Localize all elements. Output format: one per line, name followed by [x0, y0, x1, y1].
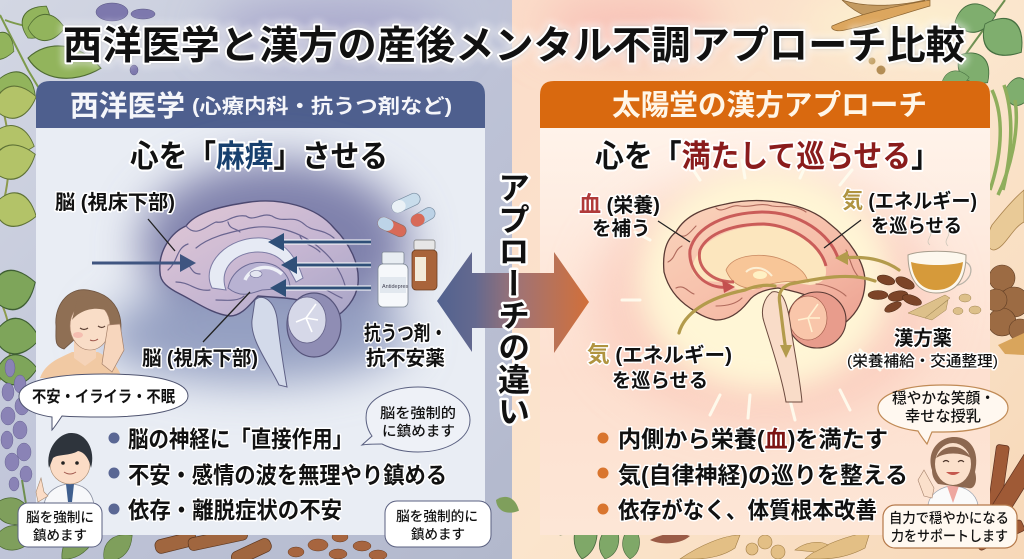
label: blood: 血 (栄養)	[579, 192, 660, 217]
note: bottom caption: 脳を強制的に	[396, 509, 478, 524]
vertical label: difference in approach: アプローチの違い	[494, 171, 530, 427]
illustration: bottom right herbs	[548, 456, 870, 559]
label: kampo medicine	[847, 327, 998, 370]
speech bubble: calm the brain	[362, 387, 470, 452]
label: qi top: 気 (エネルギー)	[842, 188, 977, 213]
note: doctor caption: 脳を強制に	[26, 510, 94, 525]
illustration: left herbs	[0, 0, 155, 559]
arrow: bidirectional comparison	[437, 252, 589, 353]
panel body	[36, 128, 485, 535]
bullet list: western: 依存・離脱症状の不安	[128, 497, 342, 523]
heading: numb the mind: 心を「麻痺」させる	[130, 139, 388, 174]
label: antidepressants: 抗不安薬	[366, 347, 445, 370]
bullet list: kampo: 依存がなく、体質根本改善	[618, 497, 877, 523]
background: kampo side	[512, 0, 1024, 559]
label: kampo medicine: 漢方薬	[894, 327, 952, 350]
note: self-healing caption: 力をサポートします	[891, 528, 1008, 544]
illustration: brain (nourished)	[664, 201, 865, 402]
decorative wash top	[210, 0, 1000, 58]
label: brain top: 脳 (視床下部)	[55, 191, 175, 214]
speech bubble: anxiety	[19, 374, 188, 430]
panel header	[540, 81, 990, 128]
header title: (心療内科・抗うつ剤など)	[192, 95, 452, 118]
arrows: qi flow	[679, 251, 899, 358]
speech bubble: calm smile: 穏やかな笑顔・	[892, 390, 995, 407]
label: antidepressants: 抗うつ剤・	[364, 322, 447, 345]
note: doctor caption: 鎮めます	[33, 527, 87, 543]
speech bubble: calm smile: 幸せな授乳	[905, 408, 981, 425]
pointer line	[824, 220, 861, 248]
label: qi bottom	[587, 342, 732, 392]
left panel: western medicine	[18, 81, 491, 547]
icon: herbal medicine	[868, 273, 981, 320]
illustration: male doctor	[36, 433, 94, 505]
right panel: kampo approach	[540, 81, 1017, 548]
panel header	[36, 81, 485, 128]
arrows: from medicine into brain	[268, 233, 371, 297]
speech bubble: anxiety: 不安・イライラ・不眠	[32, 387, 175, 406]
illustration: top right herbs	[832, 0, 930, 74]
label: brain bottom: 脳 (視床下部)	[142, 347, 258, 370]
illustration: bottom left herbs	[154, 493, 522, 559]
label: qi top	[842, 188, 977, 237]
label: blood	[579, 192, 660, 240]
illustration: female practitioner	[918, 437, 978, 505]
note: bottom caption: 鎮めます	[411, 526, 465, 542]
pointer line	[203, 292, 250, 342]
glow behind brain	[590, 160, 940, 425]
icon: white bottle: Antidepres	[382, 284, 409, 290]
header title: 西洋医学	[70, 90, 185, 123]
speech bubble: calm the brain: 脳を強制的	[380, 405, 456, 421]
background: western side	[0, 0, 512, 559]
illustration: brain (sedated)	[160, 201, 358, 387]
icon: amber bottle	[412, 240, 437, 290]
label: qi bottom: 気 (エネルギー)	[587, 342, 732, 367]
bullet list: western	[108, 426, 447, 523]
label: kampo medicine: (栄養補給・交通整理)	[847, 353, 998, 370]
speech bubble: calm the brain: に鎮めます	[382, 423, 455, 439]
bullet list: western: 不安・感情の波を無理やり鎮める	[128, 462, 447, 488]
bullet list: kampo	[598, 426, 908, 523]
bullet list: western: 脳の神経に「直接作用」	[128, 426, 353, 452]
header title: 太陽堂の漢方アプローチ	[612, 89, 927, 122]
title: 西洋医学と漢方の産後メンタル不調アプローチ比較	[63, 25, 965, 68]
label: antidepressants	[364, 322, 447, 370]
note: doctor caption	[18, 503, 102, 547]
note: bottom caption	[385, 501, 491, 547]
pointer line	[658, 221, 690, 242]
header title	[70, 90, 452, 123]
pointer line	[148, 219, 175, 251]
note: self-healing caption: 自力で穏やかになる	[889, 510, 1009, 526]
arrow: into brain from left	[92, 254, 196, 272]
illustration: right herbs and roots	[940, 0, 1024, 551]
wash behind brain	[100, 160, 410, 383]
title: 西洋医学と漢方の産後メンタル不調アプローチ比較	[63, 25, 965, 68]
bullet list: kampo: 内側から栄養(血)を満たす	[618, 426, 888, 452]
icon: tea cup	[908, 230, 971, 293]
speech bubble: calm smile	[878, 385, 1008, 444]
panel body	[540, 128, 990, 535]
icon: white bottle	[378, 252, 409, 307]
label: blood: を補う	[592, 218, 651, 240]
label: qi bottom: を巡らせる	[612, 370, 708, 392]
icon: capsules	[376, 191, 437, 239]
note: self-healing caption	[883, 505, 1017, 548]
bullet list: kampo: 気(自律神経)の巡りを整える	[618, 462, 908, 488]
illustration: distressed woman	[40, 290, 124, 378]
label: qi top: を巡らせる	[871, 215, 962, 237]
heading: fill and circulate: 心を「満たして巡らせる」	[595, 139, 940, 174]
